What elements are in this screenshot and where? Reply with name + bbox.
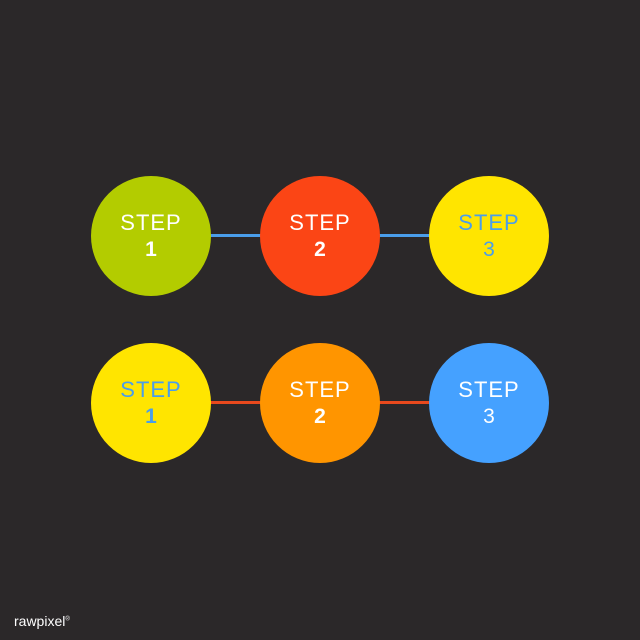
connector line row 1 — [200, 234, 440, 237]
step 2 circle row 2: STEP — [289, 377, 351, 402]
watermark: rawpixel® — [14, 613, 70, 629]
step 2 circle row 1: STEP — [289, 210, 351, 235]
step 3 circle row 2: STEP — [458, 377, 520, 402]
step 2 circle row 2 — [260, 343, 380, 463]
step 3 circle row 1: STEP — [458, 210, 520, 235]
step 1 circle row 1 — [91, 176, 211, 296]
step 3 circle row 1 — [429, 176, 549, 296]
step 2 circle row 1: 2 — [314, 238, 326, 261]
connector line row 2 — [200, 401, 440, 404]
step 1 circle row 2: 1 — [145, 405, 157, 428]
step 2 circle row 1 — [260, 176, 380, 296]
step 1 circle row 2 — [91, 343, 211, 463]
step 1 circle row 1: 1 — [145, 238, 157, 261]
step 1 circle row 2: STEP — [120, 377, 182, 402]
step 2 circle row 2: 2 — [314, 405, 326, 428]
step 3 circle row 2 — [429, 343, 549, 463]
step 3 circle row 2: 3 — [483, 405, 495, 428]
step 3 circle row 1: 3 — [483, 238, 495, 261]
step 1 circle row 1: STEP — [120, 210, 182, 235]
